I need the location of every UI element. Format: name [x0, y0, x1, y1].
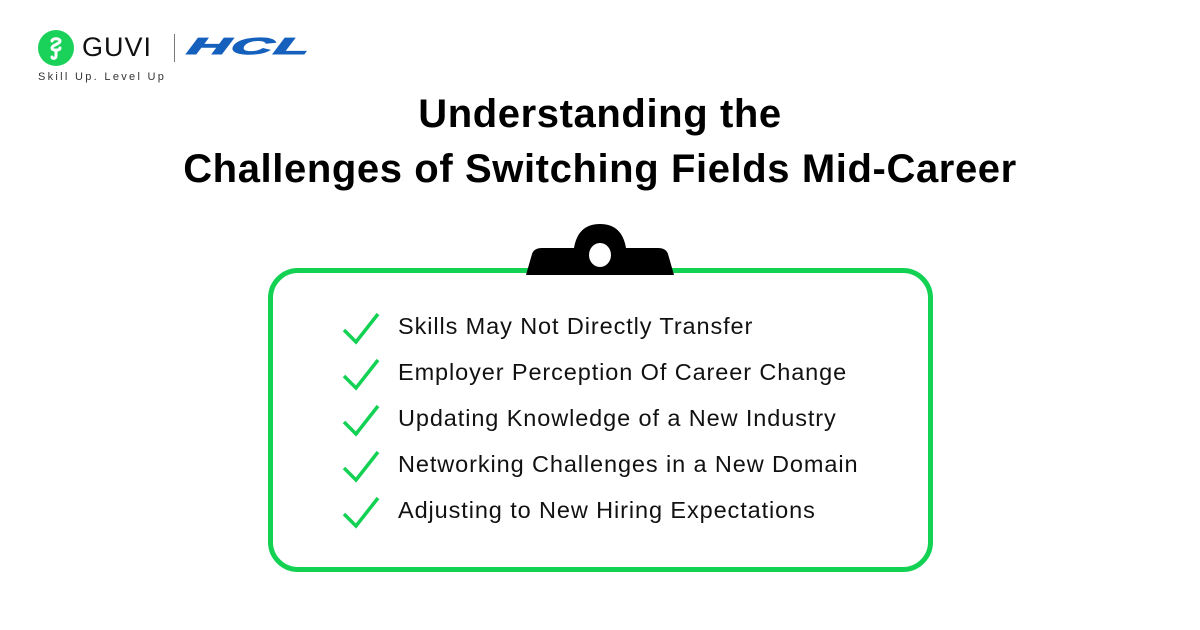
- logo text GUVI: GUVI: [82, 32, 152, 62]
- logo text HCL: HCL: [185, 33, 315, 59]
- title: Challenges of Switching Fields Mid-Career: [183, 147, 1017, 191]
- list: [342, 312, 858, 529]
- item 3: Updating Knowledge of a New Industry: [398, 405, 837, 431]
- title: [183, 92, 1017, 191]
- icon: guvi circle: [38, 30, 74, 66]
- panel: clipboard: [268, 224, 933, 572]
- item 1: [342, 312, 753, 345]
- icon: clip: [526, 224, 674, 275]
- item 2: Employer Perception Of Career Change: [398, 359, 847, 385]
- item 4: Networking Challenges in a New Domain: [398, 451, 858, 477]
- title: Understanding the: [418, 92, 782, 136]
- item 5: Adjusting to New Hiring Expectations: [398, 497, 816, 523]
- item 1: Skills May Not Directly Transfer: [398, 313, 753, 339]
- tagline: Skill Up. Level Up: [38, 71, 166, 83]
- logo: [38, 30, 315, 83]
